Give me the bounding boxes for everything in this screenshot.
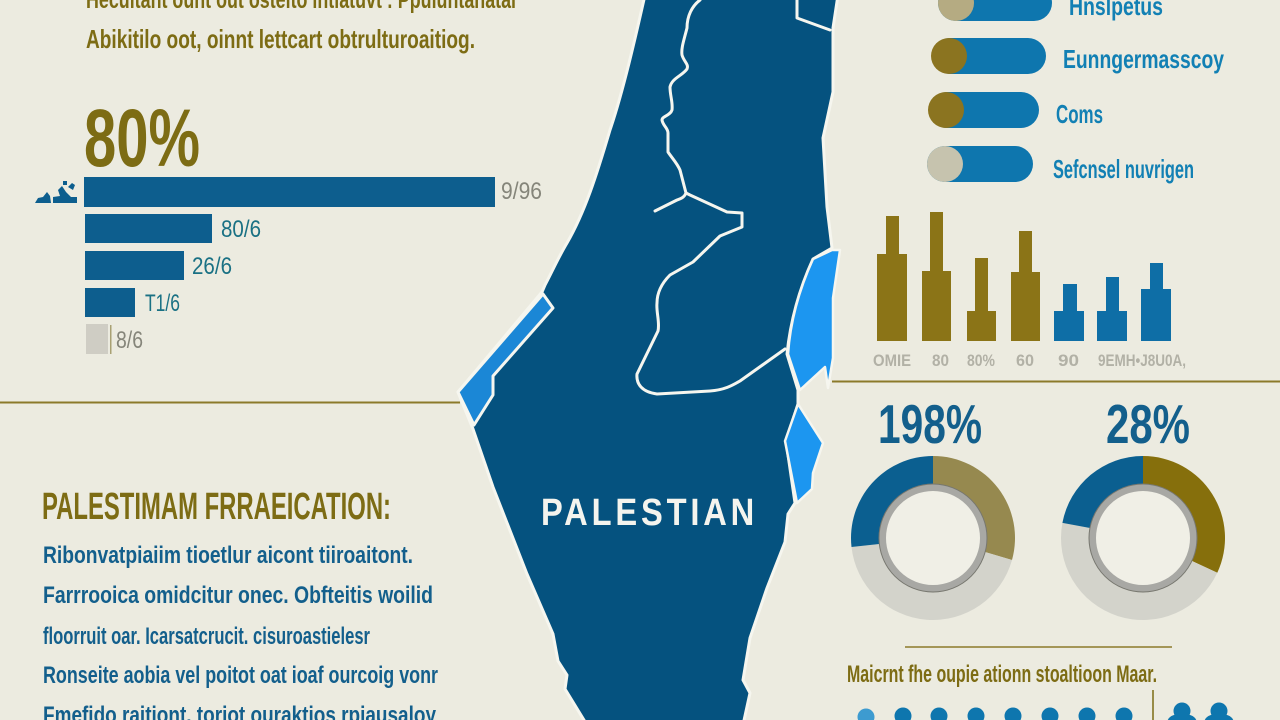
donut 1 value: 198% xyxy=(878,393,982,455)
column labels: 60 xyxy=(1016,351,1034,370)
donut 1 ring xyxy=(851,456,1015,620)
bar 3: 26/6 xyxy=(192,253,232,280)
donut chart 1 xyxy=(851,393,1015,620)
heading: left text block: PALESTIMAM FRRAEICATION: xyxy=(42,486,391,528)
bar 5: 8/6 xyxy=(116,327,143,354)
column labels: 80% xyxy=(967,351,995,370)
donut chart 2 xyxy=(1061,393,1225,620)
legend item 4 xyxy=(927,146,1194,184)
map label: PALESTIAN xyxy=(541,491,754,534)
big stat: 80%: 80% xyxy=(84,93,200,184)
intro text: Abikitilo oot, oinnt lettcart obtrulturoaitiog. xyxy=(86,24,475,54)
legend item 3: Coms xyxy=(1056,99,1103,129)
bar 1: 9/96 xyxy=(501,178,542,205)
column group: olive xyxy=(877,212,1040,341)
legend item 1 xyxy=(938,0,1163,21)
bar 1 xyxy=(84,177,542,207)
map: lower light-blue region xyxy=(785,404,823,503)
bar 3 xyxy=(85,251,232,280)
body text: Ronseite aobia vel poitot oat ioaf ourcoig vonr xyxy=(43,662,438,689)
donut 2 value: 28% xyxy=(1106,393,1190,455)
bar chart: horizontal percentages xyxy=(84,177,542,354)
body text: Farrrooica omidcitur onec. Obfteitis woilid xyxy=(43,582,433,609)
map: Gaza region xyxy=(458,294,553,425)
legend item 2: Eunngermasscoy xyxy=(1063,44,1224,74)
pill legend xyxy=(927,0,1224,184)
bar 4: T1/6 xyxy=(145,290,180,317)
column labels: 9EMH•J8U0A, xyxy=(1098,351,1186,370)
map: main territory xyxy=(458,0,838,720)
bar 5 xyxy=(86,324,143,354)
legend item 2 xyxy=(931,38,1224,74)
bar chart: stepped columns xyxy=(873,212,1186,370)
donut 2 ring xyxy=(1061,456,1225,620)
icon: people xyxy=(1167,702,1234,720)
body text: Ribonvatpiaiim tioetlur aicont tiiroaitont. xyxy=(43,542,413,569)
column labels: OMIE xyxy=(873,351,911,370)
column labels xyxy=(873,351,1186,370)
body text xyxy=(43,542,438,720)
body text: floorruit oar. Icarsatcrucit. cisuroastielesr xyxy=(43,623,370,650)
map: internal borders xyxy=(637,0,830,394)
map: upper light-blue region xyxy=(788,250,840,390)
icon: rubble xyxy=(35,181,77,203)
column labels: 90 xyxy=(1058,351,1079,370)
column group: blue xyxy=(1054,263,1171,341)
column labels: 80 xyxy=(932,351,949,370)
legend item 4: Sefcnsel nuvrigen xyxy=(1053,154,1194,184)
bar 2: 80/6 xyxy=(221,216,261,243)
map xyxy=(458,0,840,720)
intro text xyxy=(86,0,516,54)
dot row xyxy=(858,708,1132,720)
legend item 3 xyxy=(928,92,1103,129)
bar 2 xyxy=(85,214,261,243)
bar 4 xyxy=(85,288,180,317)
